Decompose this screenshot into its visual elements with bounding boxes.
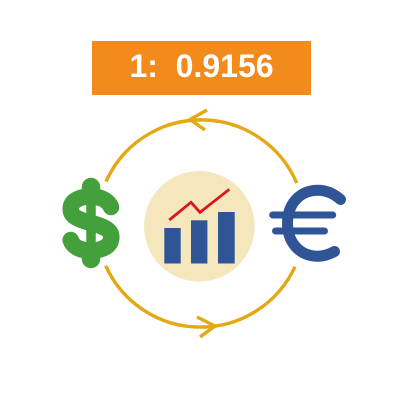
chart background circle	[144, 171, 255, 282]
arrow: top arc from euro to dollar	[106, 110, 297, 183]
arrow: bottom arc from dollar to euro	[106, 266, 295, 337]
icon: growth chart	[144, 171, 255, 282]
icon: dollar sign	[71, 187, 111, 259]
rate text: 1: 0.9156	[129, 48, 274, 84]
icon: euro sign	[273, 190, 340, 256]
bar chart	[164, 212, 235, 264]
banner: exchange rate	[92, 41, 311, 95]
trend line	[169, 189, 229, 220]
